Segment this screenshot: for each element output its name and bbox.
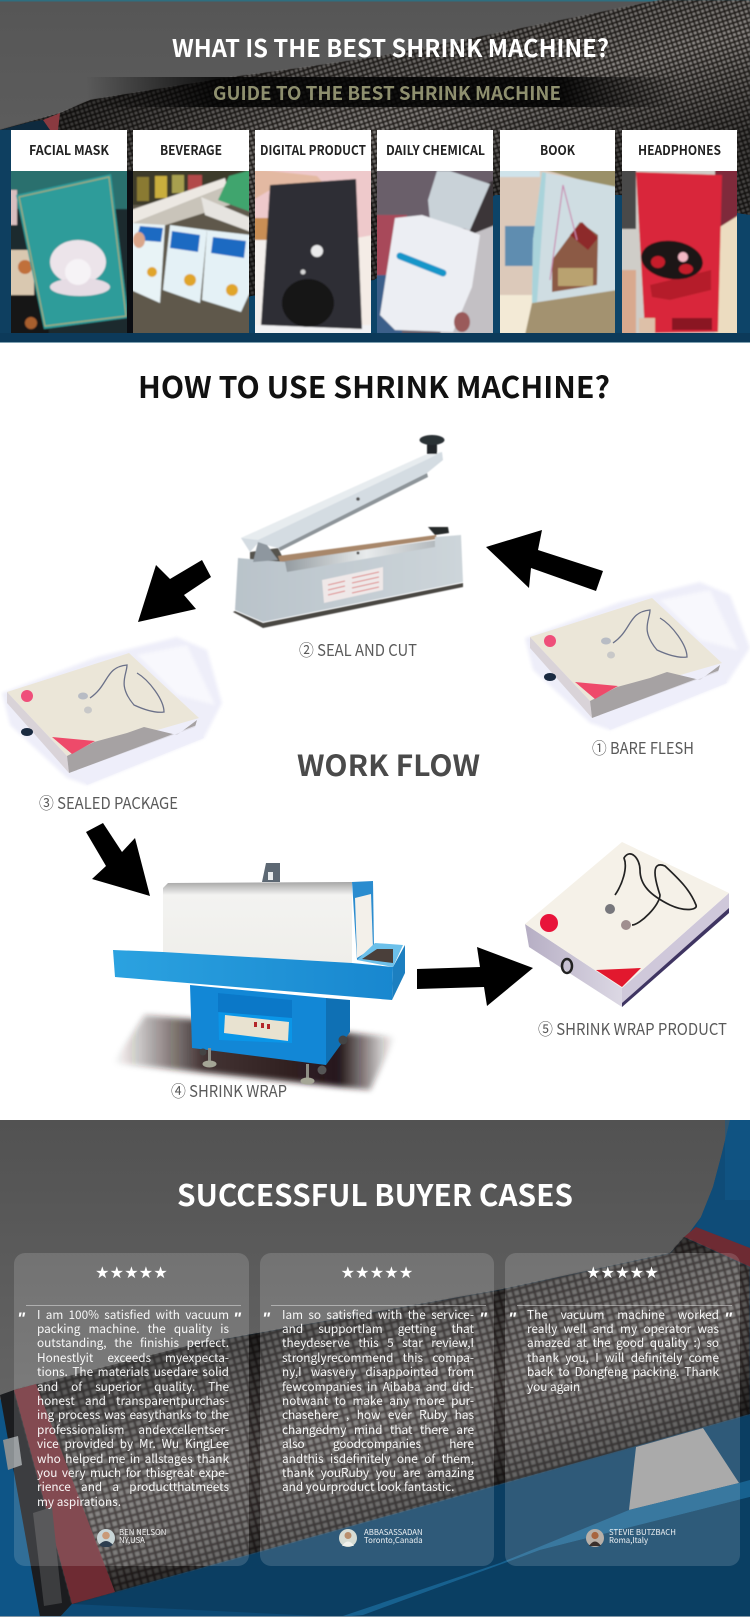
quote mark open: " bbox=[262, 1309, 270, 1328]
reviewer name: ABBASASSADAN bbox=[364, 1527, 423, 1538]
card: digital product: DIGITAL PRODUCT bbox=[260, 139, 366, 159]
review text: my aspirations. bbox=[37, 1493, 121, 1510]
label: step 3: ③ SEALED PACKAGE bbox=[39, 790, 178, 814]
review text: back to Dongfeng packing. Thank bbox=[527, 1363, 719, 1380]
reviewer name: STEVIE BUTZBACH bbox=[609, 1527, 676, 1538]
review text: who helped me in allstages thank bbox=[37, 1450, 229, 1467]
review text: vice provided by Mr. Wu KingLee bbox=[37, 1435, 229, 1452]
quote mark open: " bbox=[508, 1309, 516, 1328]
subtitle: GUIDE TO THE BEST SHRINK MACHINE bbox=[213, 79, 561, 106]
card: book: BOOK bbox=[540, 139, 576, 159]
arrow: to sealed package bbox=[138, 560, 211, 622]
illustration: sealed package bbox=[2, 637, 222, 785]
review text: stronglyrecommend this compa- bbox=[282, 1349, 474, 1366]
quote mark close: " bbox=[479, 1309, 487, 1328]
review text: thank you, I will definitely come bbox=[527, 1349, 719, 1366]
reviewer name: NY,USA bbox=[119, 1535, 145, 1546]
label: step 2: ② SEAL AND CUT bbox=[299, 637, 417, 661]
review text bbox=[282, 1306, 474, 1495]
illustration: bare flesh package bbox=[525, 582, 750, 730]
reviewer name bbox=[364, 1527, 423, 1546]
arrow: to sealer bbox=[486, 530, 603, 591]
title: WHAT IS THE BEST SHRINK MACHINE? bbox=[172, 30, 609, 65]
card: digital product bbox=[253, 130, 373, 335]
review text: amazed at the good quality :) so bbox=[527, 1334, 719, 1351]
review text: fewcompanies in Aibaba and did- bbox=[282, 1378, 474, 1395]
heading: SUCCESSFUL BUYER CASES bbox=[177, 1171, 573, 1215]
card: headphones bbox=[620, 130, 739, 335]
review text: really well and my operator was bbox=[527, 1320, 719, 1337]
review text: honest and transparentpurchas- bbox=[37, 1392, 229, 1409]
review text: changedmy mind that there are bbox=[282, 1421, 474, 1438]
testimonial card: Stevie Butzbach bbox=[508, 1263, 732, 1547]
illustration: heat sealer bbox=[233, 435, 463, 628]
review text: Iam so satisfied with the service- bbox=[282, 1306, 474, 1322]
panel: how to use workflow bbox=[2, 363, 750, 1102]
review text: and of superior quality. The bbox=[37, 1378, 229, 1395]
panel: buyer cases background and heading bbox=[0, 1120, 750, 1617]
review text: also goodcompanies here bbox=[282, 1435, 474, 1452]
reviewer name: Toronto,Canada bbox=[364, 1535, 423, 1546]
panel: guide header and product categories bbox=[0, 0, 750, 343]
testimonial card: Ben Nelson bbox=[17, 1263, 242, 1547]
review text: you again bbox=[527, 1378, 580, 1395]
label: step 1: ① BARE FLESH bbox=[592, 735, 694, 759]
review text: The vacuum machine worked bbox=[527, 1306, 719, 1322]
review text: tions. The materials usedare solid bbox=[37, 1363, 229, 1380]
heading: HOW TO USE SHRINK MACHINE? bbox=[138, 363, 610, 407]
arrow: to finished product bbox=[417, 947, 533, 1006]
quote mark open: " bbox=[17, 1309, 25, 1328]
review text: andthis isdefinitely one of them, bbox=[282, 1450, 474, 1467]
illustration: shrink wrap tunnel bbox=[113, 863, 405, 1090]
arrow: to shrink tunnel bbox=[86, 823, 150, 896]
subtitle band bbox=[86, 77, 680, 107]
review text: you very much for thisgreat expe- bbox=[37, 1464, 229, 1481]
testimonial card: Abbas Assadan bbox=[262, 1263, 488, 1547]
review text: packing machine. the quality is bbox=[37, 1320, 229, 1337]
card: facial mask: FACIAL MASK bbox=[29, 139, 110, 159]
reviewer name: Roma,Italy bbox=[609, 1535, 648, 1546]
review text: rience and a productthatmeets bbox=[37, 1478, 229, 1495]
quote mark close: " bbox=[724, 1309, 732, 1328]
review text: thank youRuby you are amazing bbox=[282, 1464, 474, 1481]
card: book bbox=[498, 130, 617, 335]
review text bbox=[527, 1306, 719, 1395]
illustration: shrink wrapped product bbox=[525, 842, 729, 1007]
review text: and yourproduct look fantastic. bbox=[282, 1478, 454, 1495]
review text: I am 100% satisfied with vacuum bbox=[37, 1306, 229, 1322]
label: step 4: ④ SHRINK WRAP bbox=[171, 1078, 287, 1102]
star rating: ★★★★★ bbox=[95, 1263, 168, 1282]
heading: work flow: WORK FLOW bbox=[297, 743, 480, 785]
reviewer name: BEN NELSON bbox=[119, 1527, 166, 1538]
review text: ny,I wasvery disappointed from bbox=[282, 1363, 474, 1380]
label: step 5: ⑤ SHRINK WRAP PRODUCT bbox=[538, 1016, 727, 1040]
review text: ing process was easythanks to the bbox=[37, 1406, 229, 1423]
review text: and supportIam getting that bbox=[282, 1320, 474, 1337]
review text: chasehere , how ever Ruby has bbox=[282, 1406, 474, 1423]
card: daily chemical bbox=[375, 130, 495, 335]
star rating: ★★★★★ bbox=[341, 1263, 413, 1282]
card: headphones: HEADPHONES bbox=[638, 139, 721, 159]
star rating: ★★★★★ bbox=[586, 1263, 659, 1282]
card: facial mask bbox=[9, 130, 129, 335]
quote mark close: " bbox=[233, 1309, 241, 1328]
card: beverage bbox=[131, 130, 251, 335]
avatar bbox=[586, 1529, 604, 1547]
review text bbox=[37, 1306, 229, 1510]
review text: professionalism andexcellentser- bbox=[37, 1421, 229, 1438]
review text: outstanding, the finishis perfect. bbox=[37, 1334, 229, 1351]
avatar bbox=[339, 1529, 357, 1547]
review text: notwant to make any more pur- bbox=[282, 1392, 474, 1409]
review text: theydeserve this 5 star review,I bbox=[282, 1334, 474, 1351]
card: beverage: BEVERAGE bbox=[160, 139, 222, 159]
avatar bbox=[97, 1529, 115, 1547]
card: daily chemical: DAILY CHEMICAL bbox=[386, 139, 485, 159]
review text: Honestlyit exceeds myexpecta- bbox=[37, 1349, 229, 1366]
reviewer name bbox=[609, 1527, 676, 1546]
reviewer name bbox=[119, 1527, 166, 1546]
